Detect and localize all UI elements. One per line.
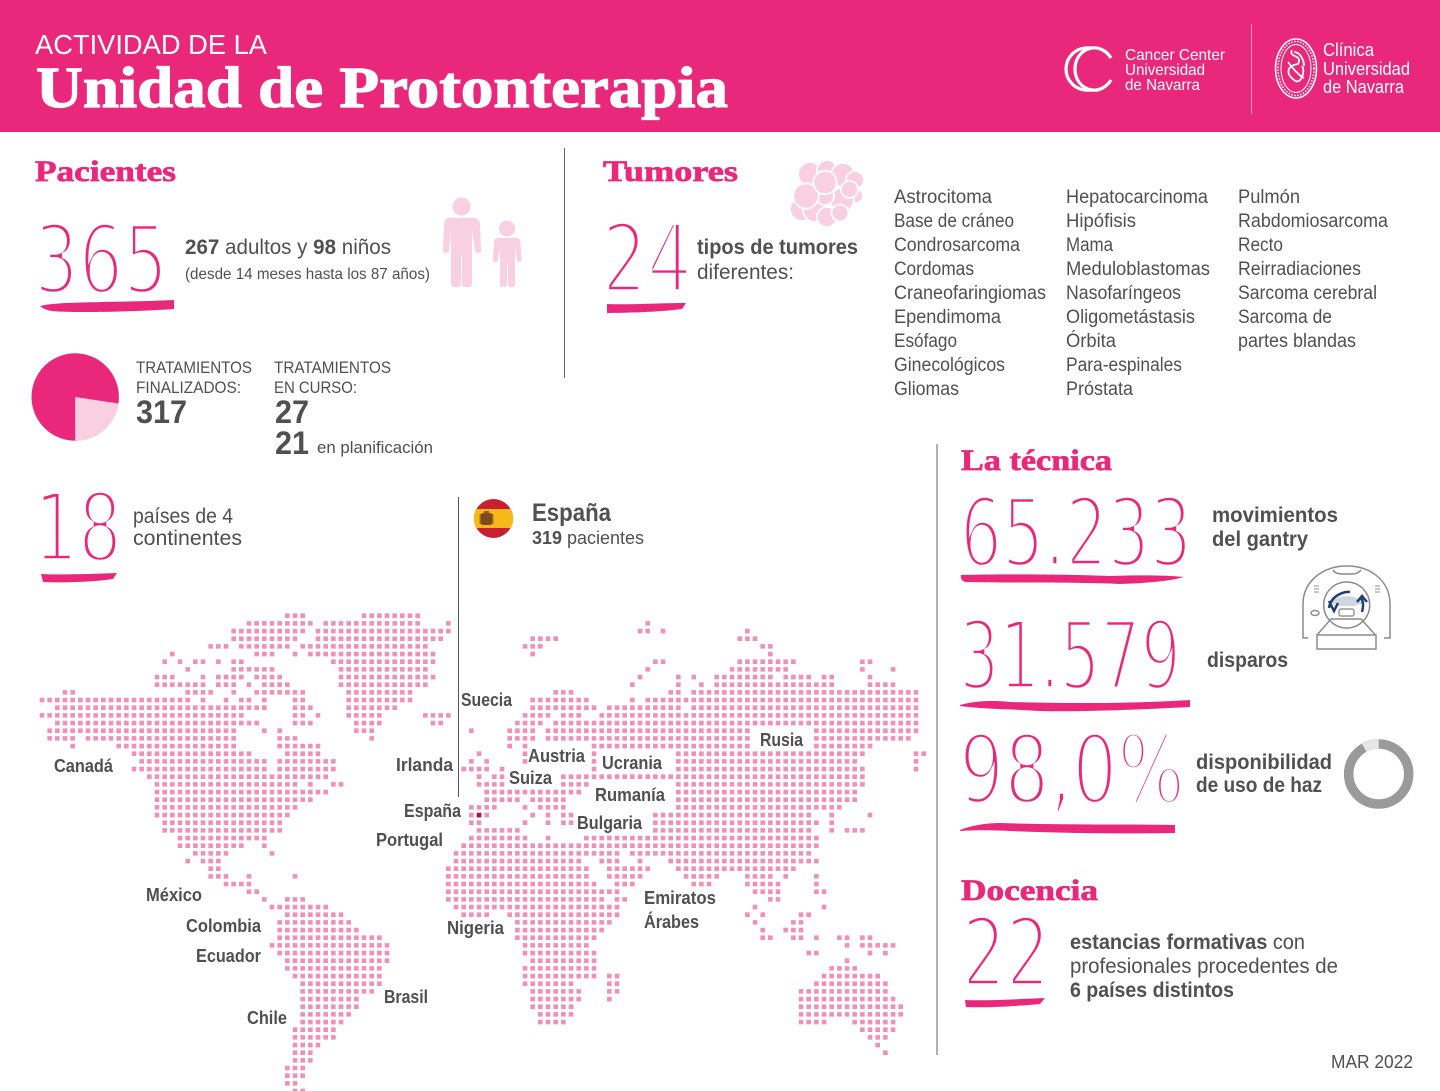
countries text: países de 4 xyxy=(133,505,233,528)
map country labels: Ecuador xyxy=(196,946,261,966)
training text xyxy=(1070,931,1338,1002)
logo: Clínica xyxy=(1276,39,1410,98)
map country labels: Nigeria xyxy=(447,918,505,938)
number: 22 stays: 22 xyxy=(962,899,1050,1009)
logo: Cancer Center xyxy=(1066,47,1226,94)
tumour list column 3 xyxy=(1238,187,1388,352)
panel: la técnica xyxy=(959,444,1409,833)
map country labels: Bulgaria xyxy=(577,813,643,833)
tumour list column 2: Nasofaríngeos xyxy=(1066,283,1181,304)
shots text: disparos xyxy=(1207,649,1288,672)
ongoing treatments: EN CURSO: xyxy=(274,378,357,397)
tumour list column 3: Pulmón xyxy=(1238,187,1300,208)
heading: Tumores: Tumores xyxy=(603,155,738,188)
map country labels: Rusia xyxy=(760,730,804,750)
map country labels: Brasil xyxy=(384,987,428,1007)
España patients: 319 pacientes xyxy=(532,528,644,548)
tumour list column 2: Oligometástasis xyxy=(1066,307,1195,328)
map country labels: Suecia xyxy=(461,690,513,710)
age range text: (desde 14 meses hasta los 87 años) xyxy=(185,266,430,283)
dot map xyxy=(40,616,929,1091)
tumour types text: tipos de tumores xyxy=(697,236,858,259)
completed treatments: FINALIZADOS: xyxy=(136,378,241,397)
pie chart: treatments xyxy=(31,353,119,441)
panel: world map: continentes xyxy=(133,527,242,550)
title: Unidad de Protonterapia xyxy=(36,55,728,120)
ongoing treatments: TRATAMIENTOS xyxy=(274,358,391,377)
map country labels: Irlanda xyxy=(396,755,454,775)
underline 22 xyxy=(965,998,1045,1007)
number: 18 countries: 18 xyxy=(34,474,122,584)
date: MAR 2022 xyxy=(1331,1052,1413,1072)
panel: tumores xyxy=(602,155,1388,400)
donut chart: availability xyxy=(1349,744,1409,804)
tumour list column 3: partes blandas xyxy=(1238,331,1356,352)
heading: Docencia: Docencia xyxy=(961,874,1098,907)
underline gantry xyxy=(961,574,1184,584)
number: 24 types: 24 xyxy=(602,205,692,315)
map country labels: España xyxy=(404,801,462,821)
ongoing treatments: 27 xyxy=(275,394,309,430)
tumour list column 1: Ginecológicos xyxy=(894,355,1005,376)
tumour list column 2: Hipófisis xyxy=(1066,211,1136,232)
logo: Clínica: de Navarra xyxy=(1323,77,1405,97)
map country labels: Ucrania xyxy=(602,753,663,773)
tumour list column 3: Rabdomiosarcoma xyxy=(1238,211,1388,232)
tumour list column 2: Hepatocarcinoma xyxy=(1066,187,1208,208)
panel: tumores: diferentes: xyxy=(697,261,794,284)
adults and children text: 267 adultos y 98 niños xyxy=(185,236,391,259)
completed treatments: TRATAMIENTOS xyxy=(136,358,252,377)
panel: pacientes xyxy=(31,155,521,461)
tumour list column 1: Cordomas xyxy=(894,259,974,280)
icon: Spanish flag xyxy=(474,499,513,538)
title kicker: ACTIVIDAD DE LA xyxy=(35,29,267,60)
map country labels: Austria xyxy=(528,746,586,766)
map country labels: México xyxy=(146,885,202,905)
Spain marker xyxy=(477,813,481,817)
map country labels: Suiza xyxy=(509,768,553,788)
underline 24 xyxy=(607,303,686,313)
tumour list column 1: Esófago xyxy=(894,331,957,352)
tumour list column 2: Meduloblastomas xyxy=(1066,259,1210,280)
map country labels: Emiratos xyxy=(644,888,716,908)
map country labels: Rumanía xyxy=(595,785,666,805)
number: gantry movements: 65.233 xyxy=(960,479,1192,589)
ongoing treatments xyxy=(274,358,433,461)
map country labels: Portugal xyxy=(376,830,443,850)
training text: 6 países distintos xyxy=(1070,979,1234,1002)
availability text: disponibilidad xyxy=(1196,751,1332,774)
number: beam availability: 98,0% xyxy=(959,716,1185,826)
icon: gantry machine xyxy=(1303,566,1390,649)
tumour list column 3: Recto xyxy=(1238,235,1283,256)
map country labels: Colombia xyxy=(186,916,262,936)
icon: cell cluster xyxy=(790,160,864,227)
underline availability xyxy=(960,823,1175,833)
number: 365 patients: 365 xyxy=(34,206,168,316)
tumour list column 2: Órbita xyxy=(1066,330,1116,352)
logo: Clínica: Universidad xyxy=(1323,59,1410,79)
underline 365 xyxy=(40,300,174,312)
España patients xyxy=(532,499,644,548)
tumour list column 2: Para-espinales xyxy=(1066,355,1182,376)
gantry text: movimientos xyxy=(1212,504,1338,527)
heading: La técnica: La técnica xyxy=(961,444,1112,477)
tumour list column 1: Base de cráneo xyxy=(894,211,1014,232)
completed treatments xyxy=(136,358,252,430)
icon: adult and child xyxy=(443,198,522,287)
panel: world map xyxy=(34,474,929,1091)
tumour list column 1: Astrocitoma xyxy=(894,187,992,208)
tumour list column 1 xyxy=(894,187,1046,400)
number: shots: 31.579 xyxy=(959,602,1181,712)
tumour list column 2: Próstata xyxy=(1066,379,1133,400)
underline 18 xyxy=(41,573,117,582)
map country labels: Canadá xyxy=(54,756,114,776)
tumour list column 2 xyxy=(1066,187,1210,400)
España patients: España xyxy=(532,499,612,527)
tumour list column 3: Sarcoma de xyxy=(1238,307,1332,328)
tumour list column 1: Ependimoma xyxy=(894,307,1001,328)
heading: Pacientes: Pacientes xyxy=(35,155,176,188)
logo: Cancer Center: Cancer Center xyxy=(1125,47,1226,64)
ongoing treatments: en planificación xyxy=(317,438,433,457)
logo: Cancer Center: de Navarra xyxy=(1125,77,1200,94)
header band xyxy=(0,0,1440,132)
panel: la técnica: de uso de haz xyxy=(1196,774,1322,797)
tumour list column 2: Mama xyxy=(1066,235,1113,256)
logo: Cancer Center: Universidad xyxy=(1125,62,1205,79)
panel: la técnica: del gantry xyxy=(1212,528,1308,551)
underline shots xyxy=(960,700,1190,711)
ongoing treatments: 21 xyxy=(275,425,309,461)
training text: estancias formativas con xyxy=(1070,931,1305,954)
tumour list column 3: Reirradiaciones xyxy=(1238,259,1361,280)
tumour list column 3: Sarcoma cerebral xyxy=(1238,283,1377,304)
map country labels: Árabes xyxy=(644,911,699,932)
map country labels xyxy=(54,690,804,1028)
tumour list column 1: Craneofaringiomas xyxy=(894,283,1046,304)
training text: profesionales procedentes de xyxy=(1070,955,1338,978)
panel: docencia xyxy=(961,874,1338,1009)
tumour list column 1: Condrosarcoma xyxy=(894,235,1020,256)
map country labels: Chile xyxy=(247,1008,287,1028)
logo: Clínica: Clínica xyxy=(1323,40,1375,60)
completed treatments: 317 xyxy=(136,394,187,430)
tumour list column 1: Gliomas xyxy=(894,379,959,400)
